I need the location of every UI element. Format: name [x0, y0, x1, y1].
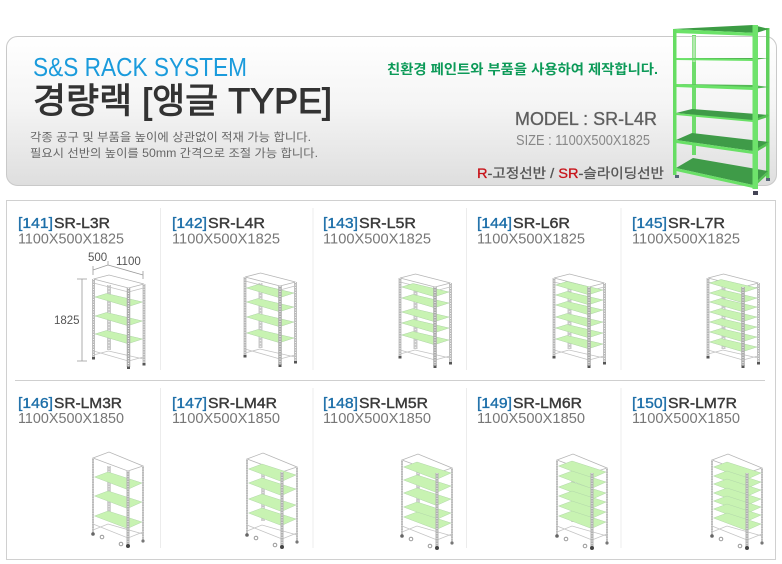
product card 143: 1100X500X1825: [323, 232, 431, 248]
rack: [552, 274, 606, 368]
product card 148: 1100X500X1850: [323, 411, 431, 427]
product card 149: [149]: [477, 396, 512, 412]
rack: [398, 274, 452, 368]
dimension labels: [54, 252, 143, 361]
product card 147: SR-LM4R: [208, 396, 277, 412]
product card 146: 1100X500X1850: [18, 411, 124, 427]
product card 147: [172, 396, 299, 549]
product card 145: 1100X500X1825: [632, 232, 740, 248]
model name: MODEL : SR-L4R: [515, 108, 657, 129]
product card 144: 1100X500X1825: [477, 232, 585, 248]
rack with casters: [710, 454, 764, 550]
product card 142: [142]: [172, 216, 207, 232]
product card 146: [18, 396, 145, 548]
main heading: 경량랙 [앵글 TYPE]: [33, 82, 332, 121]
product card 146: SR-LM3R: [54, 396, 122, 412]
product card 150: 1100X500X1850: [632, 411, 740, 427]
product card 149: 1100X500X1850: [477, 411, 585, 427]
description: [30, 131, 318, 160]
product card 141: [18, 216, 146, 369]
product card 146: [146]: [18, 396, 53, 412]
product card 150: [150]: [632, 396, 667, 412]
panel: header banner: [6, 36, 776, 186]
product card 149: SR-LM6R: [513, 396, 582, 412]
product card 150: SR-LM7R: [668, 396, 737, 412]
product card 141: [141]: [18, 216, 53, 232]
product card 150: [632, 396, 764, 550]
product card 142: [172, 216, 297, 367]
dimension labels: 500: [88, 252, 107, 264]
product card 143: SR-L5R: [359, 216, 416, 232]
product card 147: 1100X500X1850: [172, 411, 280, 427]
rack with casters: [555, 454, 609, 550]
brand line: S&S RACK SYSTEM: [33, 52, 247, 82]
dimension labels: 1100: [116, 256, 141, 268]
product card 143: [143]: [323, 216, 358, 232]
product card 144: [144]: [477, 216, 512, 232]
product card 143: [323, 216, 452, 368]
rack: [244, 273, 297, 367]
rack with casters: [91, 452, 145, 548]
product card 148: [148]: [323, 396, 358, 412]
product card 144: SR-L6R: [513, 216, 570, 232]
product card 145: [632, 216, 760, 368]
description: 필요시 선반의 높이를 50mm 간격으로 조절 가능 합니다.: [30, 146, 318, 160]
product card 148: [323, 396, 454, 550]
eco callout: 친환경 페인트와 부품을 사용하여 제작합니다.: [387, 62, 658, 77]
product card 145: SR-L7R: [668, 216, 725, 232]
product card 145: [145]: [632, 216, 667, 232]
panel: product grid: [6, 200, 776, 560]
model size: SIZE : 1100X500X1825: [516, 133, 650, 149]
shelf type legend: R-고정선반 / SR-슬라이딩선반: [477, 166, 664, 181]
rack with casters: [245, 453, 299, 549]
product card 141: SR-L3R: [54, 216, 110, 232]
rack: [706, 274, 760, 368]
description: 각종 공구 및 부품을 높이에 상관없이 적재 가능 합니다.: [30, 131, 311, 144]
product card 142: 1100X500X1825: [172, 232, 280, 248]
product card 142: SR-L4R: [208, 216, 265, 232]
rack with dimensions: [92, 275, 146, 369]
dimension labels: 1825: [54, 315, 80, 327]
image: green rack product: [673, 25, 770, 195]
product card 144: [477, 216, 606, 368]
product card 147: [147]: [172, 396, 207, 412]
product card 149: [477, 396, 609, 550]
rack with casters: [400, 454, 454, 550]
product card 141: 1100X500X1825: [18, 232, 124, 248]
product card 148: SR-LM5R: [359, 396, 428, 412]
